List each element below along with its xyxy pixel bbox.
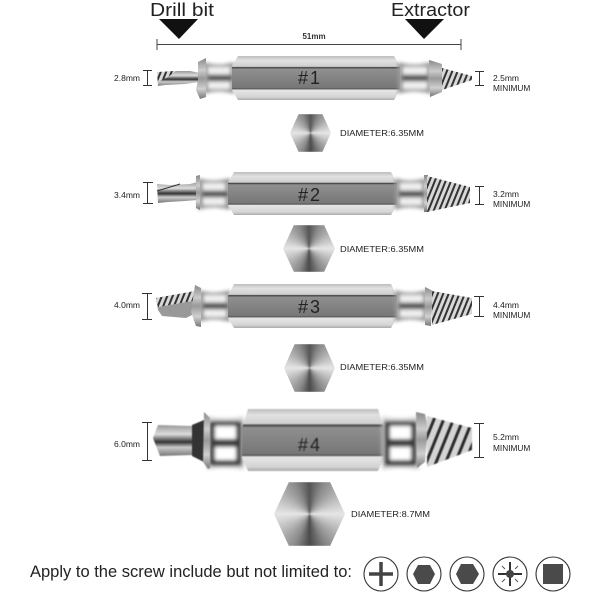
dimension: overall length 51mm: 51mm bbox=[302, 32, 326, 41]
hex cross-section #3 bbox=[284, 344, 335, 392]
right neck #3 bbox=[395, 290, 427, 322]
left flange #1 bbox=[196, 58, 206, 99]
right flange #1 bbox=[429, 60, 442, 97]
right flange #4 bbox=[416, 412, 428, 468]
dimensions: bit #1: 2.5mm bbox=[493, 73, 519, 83]
dimensions: bit #4: 5.2mm bbox=[493, 432, 519, 442]
dimensions: bit #2: 3.4mm bbox=[114, 190, 140, 200]
right neck #2 bbox=[395, 178, 426, 210]
right flange #3 bbox=[425, 287, 433, 326]
dimensions: bit #2: MINIMUM bbox=[493, 199, 530, 209]
right flange #2 bbox=[424, 175, 428, 212]
diameter label #2: DIAMETER:6.35MM bbox=[340, 244, 424, 254]
bit #4 bbox=[153, 409, 472, 471]
diameter label #1: DIAMETER:6.35MM bbox=[340, 128, 424, 138]
right extractor #1 bbox=[442, 68, 472, 90]
label: Drill bit: Drill bit bbox=[150, 0, 214, 20]
left neck #3 bbox=[199, 290, 230, 322]
diameter label #4: DIAMETER:8.7MM bbox=[351, 509, 430, 519]
dimensions: bit #1: 2.8mm bbox=[114, 73, 140, 83]
bit #3 bbox=[156, 284, 472, 328]
icon: phillips screw head bbox=[364, 557, 398, 591]
dimensions: bit #2: 3.2mm bbox=[493, 189, 519, 199]
dimensions: bit #3: 4.4mm bbox=[493, 300, 519, 310]
left neck #1 bbox=[204, 62, 234, 94]
icon: large hex screw head bbox=[450, 557, 484, 591]
footer text: Apply to the screw include but not limited to: bbox=[30, 563, 352, 581]
bit #1 bbox=[157, 56, 472, 100]
dimensions: bit #1 bbox=[114, 70, 530, 93]
left flange #3 bbox=[191, 285, 201, 327]
dimensions: bit #3: 4.0mm bbox=[114, 300, 140, 310]
bit label #3: #3 bbox=[298, 297, 322, 317]
hex shank #1 bbox=[232, 56, 400, 100]
right extractor #2 bbox=[427, 176, 470, 212]
dimension: overall length 51mm bbox=[157, 32, 461, 50]
left tip #2 bbox=[157, 182, 198, 203]
right neck #4 bbox=[382, 416, 419, 470]
icon: small hex screw head bbox=[407, 557, 441, 591]
left flange #4 bbox=[203, 412, 210, 469]
bit label #2: #2 bbox=[298, 185, 322, 205]
hex shank #4 bbox=[242, 409, 384, 471]
hex shank #3 bbox=[228, 284, 397, 328]
hex cross-section #2 bbox=[283, 225, 335, 272]
arrow: drill bit pointer bbox=[159, 19, 198, 39]
dimensions: bit #3: MINIMUM bbox=[493, 310, 530, 320]
left neck #2 bbox=[198, 178, 230, 210]
hex shank #2 bbox=[228, 172, 397, 215]
right neck #1 bbox=[398, 62, 431, 94]
left tip #4 bbox=[153, 420, 204, 462]
arrow: extractor pointer bbox=[405, 19, 444, 39]
right extractor #3 bbox=[432, 291, 472, 325]
bit label #4: #4 bbox=[298, 435, 322, 455]
dimensions: bit #2 bbox=[114, 182, 530, 209]
right extractor #4 bbox=[427, 416, 472, 467]
label: Extractor: Extractor bbox=[391, 0, 470, 20]
dimensions: bit #1: MINIMUM bbox=[493, 83, 530, 93]
left tip #3 bbox=[156, 291, 200, 318]
diameter label #3: DIAMETER:6.35MM bbox=[340, 362, 424, 372]
icon: square screw head bbox=[536, 557, 570, 591]
hex cross-section #1 bbox=[290, 114, 331, 152]
hex cross-section #4 bbox=[274, 482, 345, 546]
dimensions: bit #4: 6.0mm bbox=[114, 439, 140, 449]
dimensions: bit #4: MINIMUM bbox=[493, 443, 530, 453]
bit label #1: #1 bbox=[298, 68, 322, 88]
left tip #1 bbox=[157, 71, 200, 86]
dimensions: bit #3 bbox=[114, 293, 530, 320]
bit #2 bbox=[157, 172, 470, 215]
icon: pozidriv screw head bbox=[493, 557, 527, 591]
left neck #4 bbox=[207, 416, 244, 470]
dimensions: bit #4 bbox=[114, 422, 530, 461]
left flange #2 bbox=[196, 175, 200, 210]
